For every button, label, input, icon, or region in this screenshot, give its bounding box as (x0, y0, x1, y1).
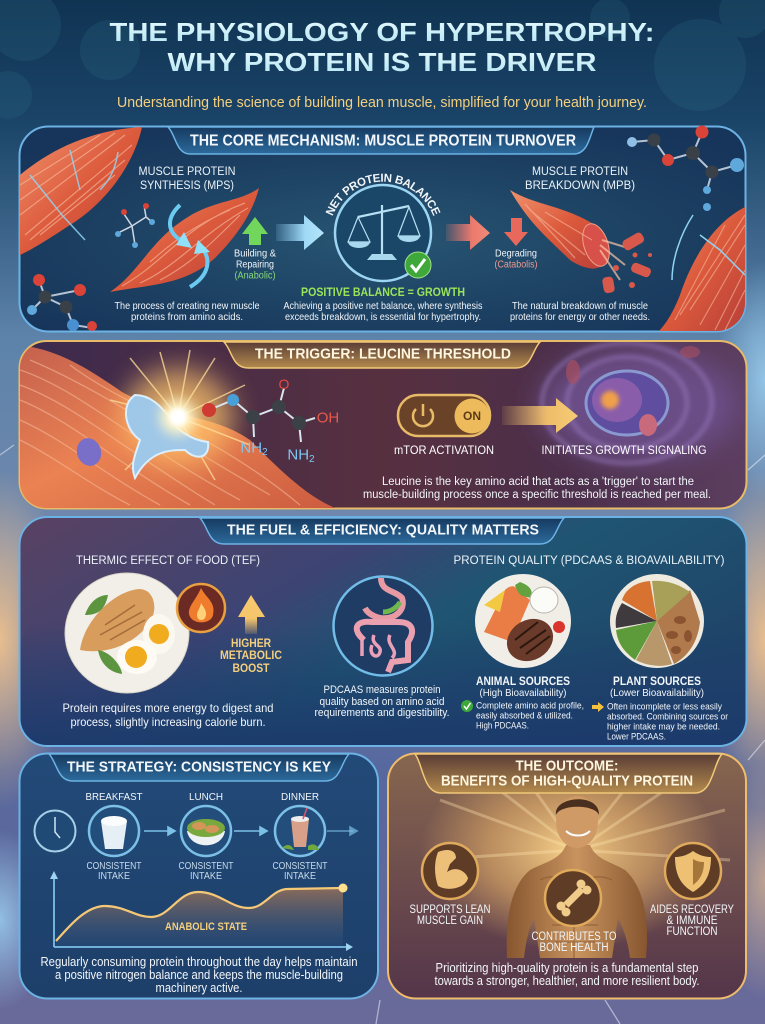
heading: MPS: SYNTHESIS (MPS) (140, 180, 234, 192)
header: strategy: THE STRATEGY: CONSISTENCY IS KEY (67, 758, 331, 776)
text: strategy description: machinery active. (156, 981, 242, 995)
label: recovery: AIDES RECOVERY (650, 904, 734, 916)
icon: degrading arrow (504, 218, 528, 246)
header: strategy (49, 754, 349, 781)
icon: mTOR toggle: ON (463, 409, 481, 423)
heading: MPS: MUSCLE PROTEIN (138, 166, 236, 178)
heading: animal sources (476, 674, 570, 699)
text: building and repairing: (Anabolic) (234, 270, 276, 282)
labels: consistent intake: INTAKE (190, 870, 222, 882)
heading: plant sources: (Lower Bioavailability) (610, 687, 704, 699)
panel: core mechanism (18, 126, 746, 332)
labels: consistent intake: CONSISTENT (178, 860, 234, 872)
icon: mTOR toggle (398, 395, 490, 436)
icon: top right molecule (627, 126, 744, 211)
label: bone health: BONE HEALTH (540, 942, 608, 954)
icon: dinner shake (275, 806, 325, 856)
heading: MPB: MUSCLE PROTEIN (532, 166, 628, 178)
icon: lunch salad (181, 806, 231, 856)
label: growth signaling: INITIATES GROWTH SIGNALING (542, 445, 707, 457)
text: animal description (476, 700, 584, 732)
chart: anabolic state (50, 871, 353, 951)
icon: left corner muscle (20, 127, 142, 255)
text: plant description: Lower PDCAAS. (607, 732, 666, 742)
text: degrading: Degrading (495, 248, 537, 260)
icon: flame (177, 584, 225, 632)
label: lean muscle: SUPPORTS LEAN (410, 904, 490, 916)
icon: building arrow (242, 217, 268, 245)
text: plant description (607, 702, 728, 742)
icon: net balance scale: NET PROTEIN BALANCE (326, 174, 440, 216)
text: outcome description (434, 961, 700, 988)
text: PDCAAS description: quality based on amino acid (320, 696, 444, 708)
header: core mechanism (168, 127, 594, 154)
heading: MPB: BREAKDOWN (MPB) (525, 180, 635, 192)
text: outcome description: Prioritizing high-quality protein is a fundamental step (436, 961, 699, 975)
chart: anabolic state: ANABOLIC STATE (165, 921, 247, 933)
heading: MPS (138, 166, 236, 192)
text: MPS description: proteins from amino acids. (131, 311, 243, 323)
icon: breakfast yogurt (89, 806, 139, 856)
text: PDCAAS description (314, 684, 450, 719)
icon: MPB muscle (510, 190, 652, 294)
label: higher metabolic boost: METABOLIC (220, 648, 282, 662)
heading: animal sources: (High Bioavailability) (480, 687, 566, 699)
icon: leucine molecule: NH (240, 440, 262, 456)
icon: leucine molecule: 2 (309, 454, 315, 464)
label: bone health: CONTRIBUTES TO (532, 931, 617, 943)
panel: fuel and efficiency (20, 517, 746, 746)
icon: cell (540, 343, 740, 463)
text: strategy description: Regularly consuming protein throughout the day helps maintain (40, 955, 358, 969)
text: leucine description (363, 476, 711, 501)
text: degrading (494, 248, 538, 270)
arrow: red from balance (446, 215, 490, 250)
label: mTOR activation: mTOR ACTIVATION (394, 445, 494, 457)
text: plant description: higher intake may be needed. (607, 722, 720, 732)
icon: chicken and egg plate (65, 573, 189, 693)
icon: lower left molecule (27, 274, 97, 331)
icon: leucine molecule (202, 376, 339, 464)
icon: muscle arm (422, 843, 478, 899)
title (110, 17, 654, 77)
icon: right corner muscle (658, 207, 745, 332)
icon: leucine molecule: NH (287, 446, 309, 464)
text: TEF description: Protein requires more energy to digest and (62, 701, 274, 715)
text: MPB description (510, 300, 650, 323)
text: strategy description (40, 955, 358, 995)
text: degrading: (Catabolis) (494, 260, 538, 270)
meal labels: BREAKFAST (86, 791, 143, 803)
arrow: blue to balance (276, 215, 324, 250)
icon: MPS muscle (110, 188, 259, 292)
text: plant description: Often incomplete or less easily (607, 702, 722, 712)
header: trigger (224, 342, 540, 368)
text: MPB description: The natural breakdown of muscle (512, 300, 648, 312)
icon: leucine molecule: OH (317, 410, 339, 426)
label: higher metabolic boost: BOOST (232, 661, 270, 675)
text: building and repairing (234, 248, 276, 282)
header: fuel (200, 518, 564, 544)
label: positive balance: POSITIVE BALANCE = GROWTH (301, 285, 465, 299)
text: outcome description: towards a stronger, healthier, and more resilient body. (434, 974, 700, 988)
text: leucine description: Leucine is the key amino acid that acts as a 'trigger' to start the (382, 476, 694, 488)
heading: TEF: THERMIC EFFECT OF FOOD (TEF) (76, 555, 260, 567)
labels: consistent intake: CONSISTENT (86, 860, 142, 872)
icon: animal sources plate (475, 574, 571, 669)
text: PDCAAS description: PDCAAS measures protein (324, 684, 440, 696)
figure: muscular man (440, 794, 730, 958)
panel: strategy (20, 754, 378, 998)
text: PDCAAS description: requirements and digestibility. (314, 707, 450, 719)
text: strategy description: a positive nitrogen balance and keeps the muscle-building (55, 968, 343, 982)
header: outcome (415, 754, 722, 793)
text: balance description: Achieving a positive net balance, where synthesis (284, 300, 482, 312)
panel: trigger (20, 341, 746, 508)
label: higher metabolic boost (220, 636, 282, 675)
icon: clock (34, 810, 76, 852)
icon: net balance scale (326, 174, 440, 282)
label: recovery: FUNCTION (666, 926, 718, 938)
heading: MPB (525, 166, 635, 192)
icon: leucine molecule: O (279, 376, 290, 392)
text: MPS description (114, 300, 260, 323)
text: building and repairing: Building & (234, 248, 276, 260)
icon: green check (461, 700, 473, 712)
icon: bone (545, 870, 601, 926)
icon: amino molecule (115, 203, 155, 248)
icon: leucine molecule: 2 (262, 446, 268, 458)
icon: plant sources bowl (610, 574, 704, 668)
heading: plant sources: PLANT SOURCES (613, 674, 701, 688)
text: leucine description: muscle-building process once a specific threshold is reached per meal. (363, 489, 711, 501)
header: outcome: THE OUTCOME: (516, 758, 618, 774)
header: trigger: THE TRIGGER: LEUCINE THRESHOLD (255, 346, 511, 362)
arrow: to growth signaling (502, 398, 578, 433)
text: animal description: easily absorbed & utilized. (476, 710, 573, 722)
arrows between meals (144, 827, 357, 835)
text: animal description: Complete amino acid profile, (476, 700, 584, 712)
meal labels (86, 791, 319, 803)
text: animal description: High PDCAAS. (476, 720, 529, 732)
text: TEF description (62, 701, 274, 729)
heading: animal sources: ANIMAL SOURCES (476, 674, 570, 688)
icon: muscle with receptor (20, 345, 335, 508)
text: MPS description: The process of creating new muscle (114, 300, 260, 312)
icon: shield (665, 843, 721, 899)
icon: digestive system (334, 576, 432, 676)
labels: consistent intake: CONSISTENT (272, 860, 328, 872)
label: lean muscle: MUSCLE GAIN (417, 915, 483, 927)
text: plant description: absorbed. Combining sources or (607, 712, 728, 722)
label: lean muscle (410, 904, 490, 927)
labels: consistent intake (86, 860, 328, 882)
text: MPB description: proteins for energy or other needs. (510, 311, 650, 323)
text: balance description (284, 300, 482, 323)
label: bone health (532, 931, 617, 954)
title: WHY PROTEIN IS THE DRIVER (168, 47, 597, 77)
header: core mechanism: THE CORE MECHANISM: MUSCLE PROTEIN TURNOVER (190, 132, 576, 150)
header: fuel: THE FUEL & EFFICIENCY: QUALITY MATTERS (227, 522, 539, 538)
label: higher metabolic boost: HIGHER (231, 636, 271, 650)
label: recovery: & IMMUNE (666, 915, 718, 927)
heading: protein quality: PROTEIN QUALITY (PDCAAS & BIOAVAILABILITY) (454, 555, 725, 567)
subtitle: Understanding the science of building lean muscle, simplified for your health journey. (117, 95, 647, 111)
text: TEF description: process, slightly increasing calorie burn. (70, 715, 266, 729)
icon: up arrow (238, 595, 265, 634)
panel: outcome (388, 750, 746, 998)
meal labels: LUNCH (189, 791, 223, 803)
icon: yellow arrow (592, 702, 604, 712)
title: THE PHYSIOLOGY OF HYPERTROPHY: (110, 17, 654, 47)
text: balance description: exceeds breakdown, is essential for hypertrophy. (285, 311, 481, 323)
header: outcome: BENEFITS OF HIGH-QUALITY PROTEIN (441, 772, 693, 790)
label: recovery (650, 904, 734, 938)
labels: consistent intake: INTAKE (98, 870, 130, 882)
heading: plant sources (610, 674, 704, 699)
text: building and repairing: Repairing (236, 260, 274, 270)
labels: consistent intake: INTAKE (284, 870, 316, 882)
meal labels: DINNER (281, 791, 319, 803)
